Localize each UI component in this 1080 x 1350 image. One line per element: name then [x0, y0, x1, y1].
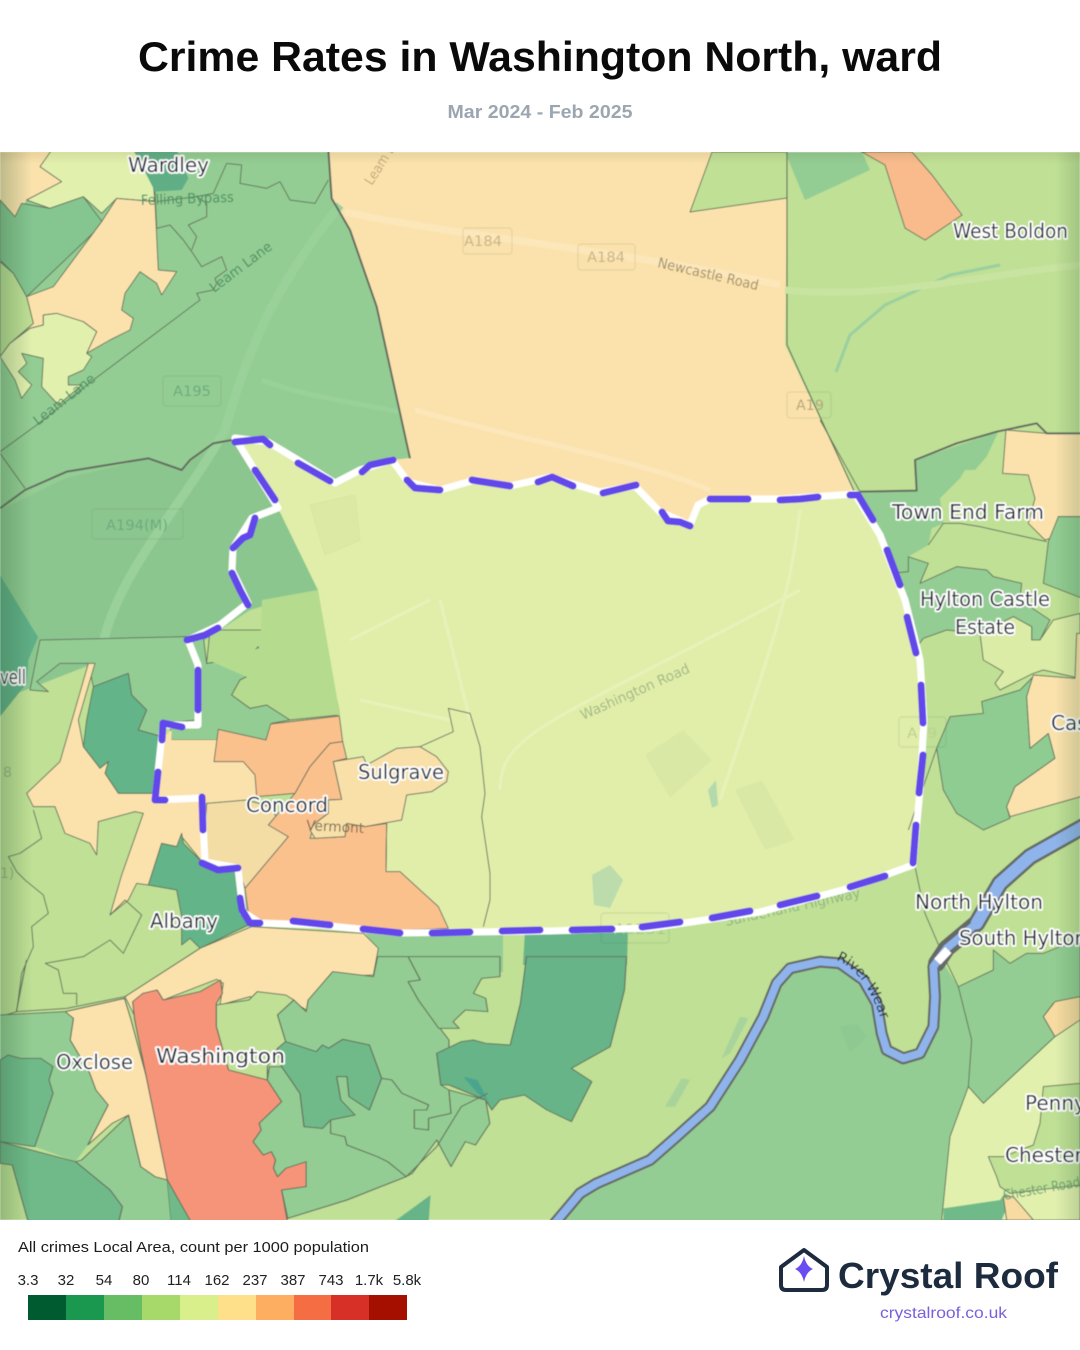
- map labels: places: Sulgrave: [358, 760, 444, 784]
- map labels: places: Washington: [156, 1044, 285, 1068]
- map labels: road shields: 1): [0, 866, 14, 882]
- map labels: places: Hylton Castle: [920, 587, 1050, 611]
- map labels: road shields: A19: [796, 398, 824, 414]
- icon: River Wear: [553, 827, 1080, 1225]
- map labels: places: North Hylton: [915, 890, 1043, 914]
- panel: north-east green sliver: [690, 152, 787, 212]
- legend: colour scale values: 80: [133, 1272, 149, 1289]
- map labels: road names: Washington Road: [578, 661, 692, 724]
- panel: top-right green: [785, 152, 870, 200]
- panel: south Washington LSOAs: [0, 957, 627, 1223]
- title: Crime Rates in Washington North, ward: [138, 33, 942, 80]
- map labels: road shields: A19: [907, 726, 937, 742]
- legend: colour scale values: 114: [167, 1272, 191, 1289]
- road bands: [100, 205, 1080, 660]
- panel: green band south of ward: [365, 930, 503, 972]
- legend: colour scale values: 743: [318, 1272, 344, 1289]
- stream: [836, 265, 1000, 372]
- legend: colour scale values: 387: [280, 1272, 306, 1289]
- icon: house with star: [781, 1250, 827, 1290]
- legend: colour scale swatches: [28, 1295, 407, 1320]
- map labels: places: Wardley: [128, 153, 209, 177]
- legend: colour scale values: 237: [242, 1272, 268, 1289]
- panel: dark green top band south of ward: [523, 930, 628, 965]
- legend title: All crimes Local Area, count per 1000 population: [18, 1239, 369, 1256]
- legend: colour scale values: 5.8k: [393, 1272, 422, 1289]
- map labels: road names: Leam L: [362, 142, 399, 188]
- map labels: road names: Leam Lane: [207, 239, 276, 296]
- map labels: road shields: A195: [173, 384, 211, 400]
- ward boundary: white line: [155, 438, 924, 933]
- map labels: places: vell: [0, 665, 26, 689]
- map labels: road names: Felling Bypass: [141, 190, 234, 209]
- road name: River Wear: River Wear: [837, 950, 889, 1018]
- map labels: places: [0, 153, 1080, 1167]
- ward ponds and fields: [592, 780, 718, 908]
- panel: north-west LSOAs: [0, 150, 410, 508]
- map labels: road names: Sunderland Highway: [724, 886, 862, 930]
- map labels: road names: Leam Lane: [31, 371, 99, 429]
- ward boundary: purple dashes: [155, 439, 923, 933]
- boundary line east of north peach: [787, 152, 855, 493]
- map labels: places: Albany: [150, 909, 218, 933]
- panel: ward inner detail: [310, 495, 800, 800]
- website link text: crystalroof.co.uk: [880, 1305, 1008, 1322]
- map labels: places: Town End Farm: [891, 500, 1044, 524]
- map labels: road shields: A184: [587, 250, 625, 266]
- map labels: road shields: A184: [464, 234, 502, 250]
- map labels: places: Estate: [955, 615, 1015, 639]
- legend: colour scale values: 32: [58, 1272, 74, 1289]
- map labels: road names: Newcastle Road: [656, 255, 760, 294]
- legend: colour scale values: 1.7k: [355, 1272, 384, 1289]
- legend: colour scale values: [18, 1272, 422, 1289]
- panel: ward area fill: [235, 438, 924, 933]
- map labels: road shields: [0, 228, 946, 943]
- map labels: road shields: 8: [3, 765, 12, 781]
- legend: colour scale values: 3.3: [18, 1272, 38, 1289]
- map labels: road names: Vermont: [306, 818, 365, 837]
- panel: yellow-green LSOA inside ward: [207, 590, 340, 716]
- map labels: places: West Boldon: [953, 219, 1068, 243]
- map labels: places: Oxclose: [56, 1050, 133, 1074]
- subtitle: date range: Mar 2024 - Feb 2025: [448, 102, 632, 122]
- logo: Crystal Roof: Crystal Roof: [838, 1255, 1059, 1296]
- map edge shading: [0, 152, 1080, 1220]
- map labels: places: Concord: [246, 793, 328, 817]
- logo: Crystal Roof: [781, 1250, 1059, 1296]
- panel: West Boldon orange area: [862, 152, 962, 240]
- panel: north-east LSOAs (Town End Farm, Hylton Castle): [820, 420, 1080, 830]
- map labels: road shields: A194(M): [106, 518, 168, 534]
- panel: west dark green LSOA: [0, 576, 38, 637]
- panel: central-west LSOAs: [0, 630, 339, 915]
- panel: north peach area: [328, 152, 855, 525]
- legend: colour scale values: 54: [96, 1272, 112, 1289]
- panel: central LSOAs inside and beside ward: [0, 708, 490, 1017]
- map labels: road names: [32, 152, 1080, 1200]
- panel: south-east LSOAs below the river: [553, 867, 1080, 1223]
- map labels: road shields: A1231: [614, 922, 666, 938]
- legend: colour scale values: 162: [204, 1272, 230, 1289]
- panel: A194(M) darker green area: [0, 438, 318, 700]
- panel: north-west green area: [0, 152, 410, 510]
